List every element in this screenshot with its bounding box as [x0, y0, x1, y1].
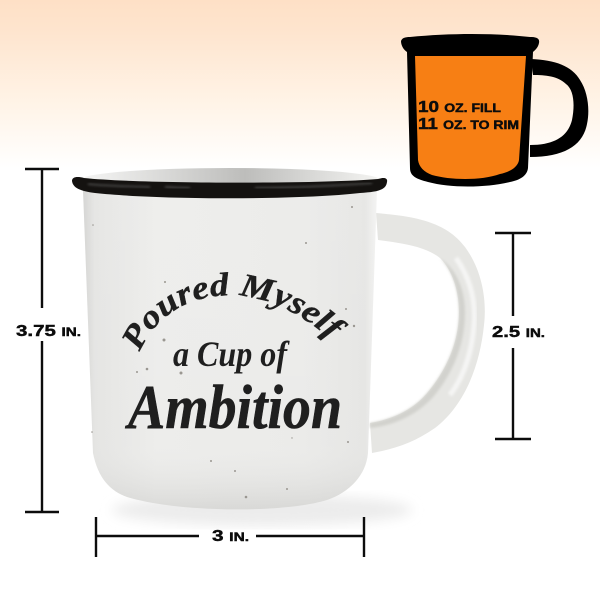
slogan line: a Cup of: a Cup of: [173, 334, 290, 374]
capacity icon: [401, 34, 588, 186]
speckles: [91, 206, 355, 498]
icon capacity text: 10 OZ. FILL: [418, 99, 501, 116]
handle dimension: 2.5 in.: [492, 233, 545, 439]
icon mug silhouette: [401, 34, 539, 186]
slogan line: Ambition: Ambition: [124, 374, 342, 442]
width dimension: 3 in.: [96, 517, 364, 557]
mug body: [83, 190, 377, 509]
icon capacity text: [418, 99, 519, 133]
mug handle: [370, 213, 485, 453]
icon handle: [530, 59, 588, 157]
photo of enamel mug: [72, 168, 485, 510]
height dimension: 3.75 in.: [16, 169, 81, 512]
mug interior: [80, 168, 380, 192]
mug shadow: [112, 494, 412, 526]
height dimension: 3.75 in.: 3.75 IN.: [16, 323, 81, 340]
width dimension: 3 in.: 3 IN.: [212, 528, 249, 545]
background gradient: [0, 0, 600, 168]
mug slogan: [122, 272, 349, 442]
black enamel rim: [72, 177, 387, 198]
icon capacity text: 11 OZ. TO RIM: [418, 116, 519, 133]
icon orange fill: [415, 56, 526, 179]
handle dimension: 2.5 in.: 2.5 IN.: [492, 324, 545, 341]
slogan line: Poured Myself: Poured Myself: [122, 272, 349, 352]
